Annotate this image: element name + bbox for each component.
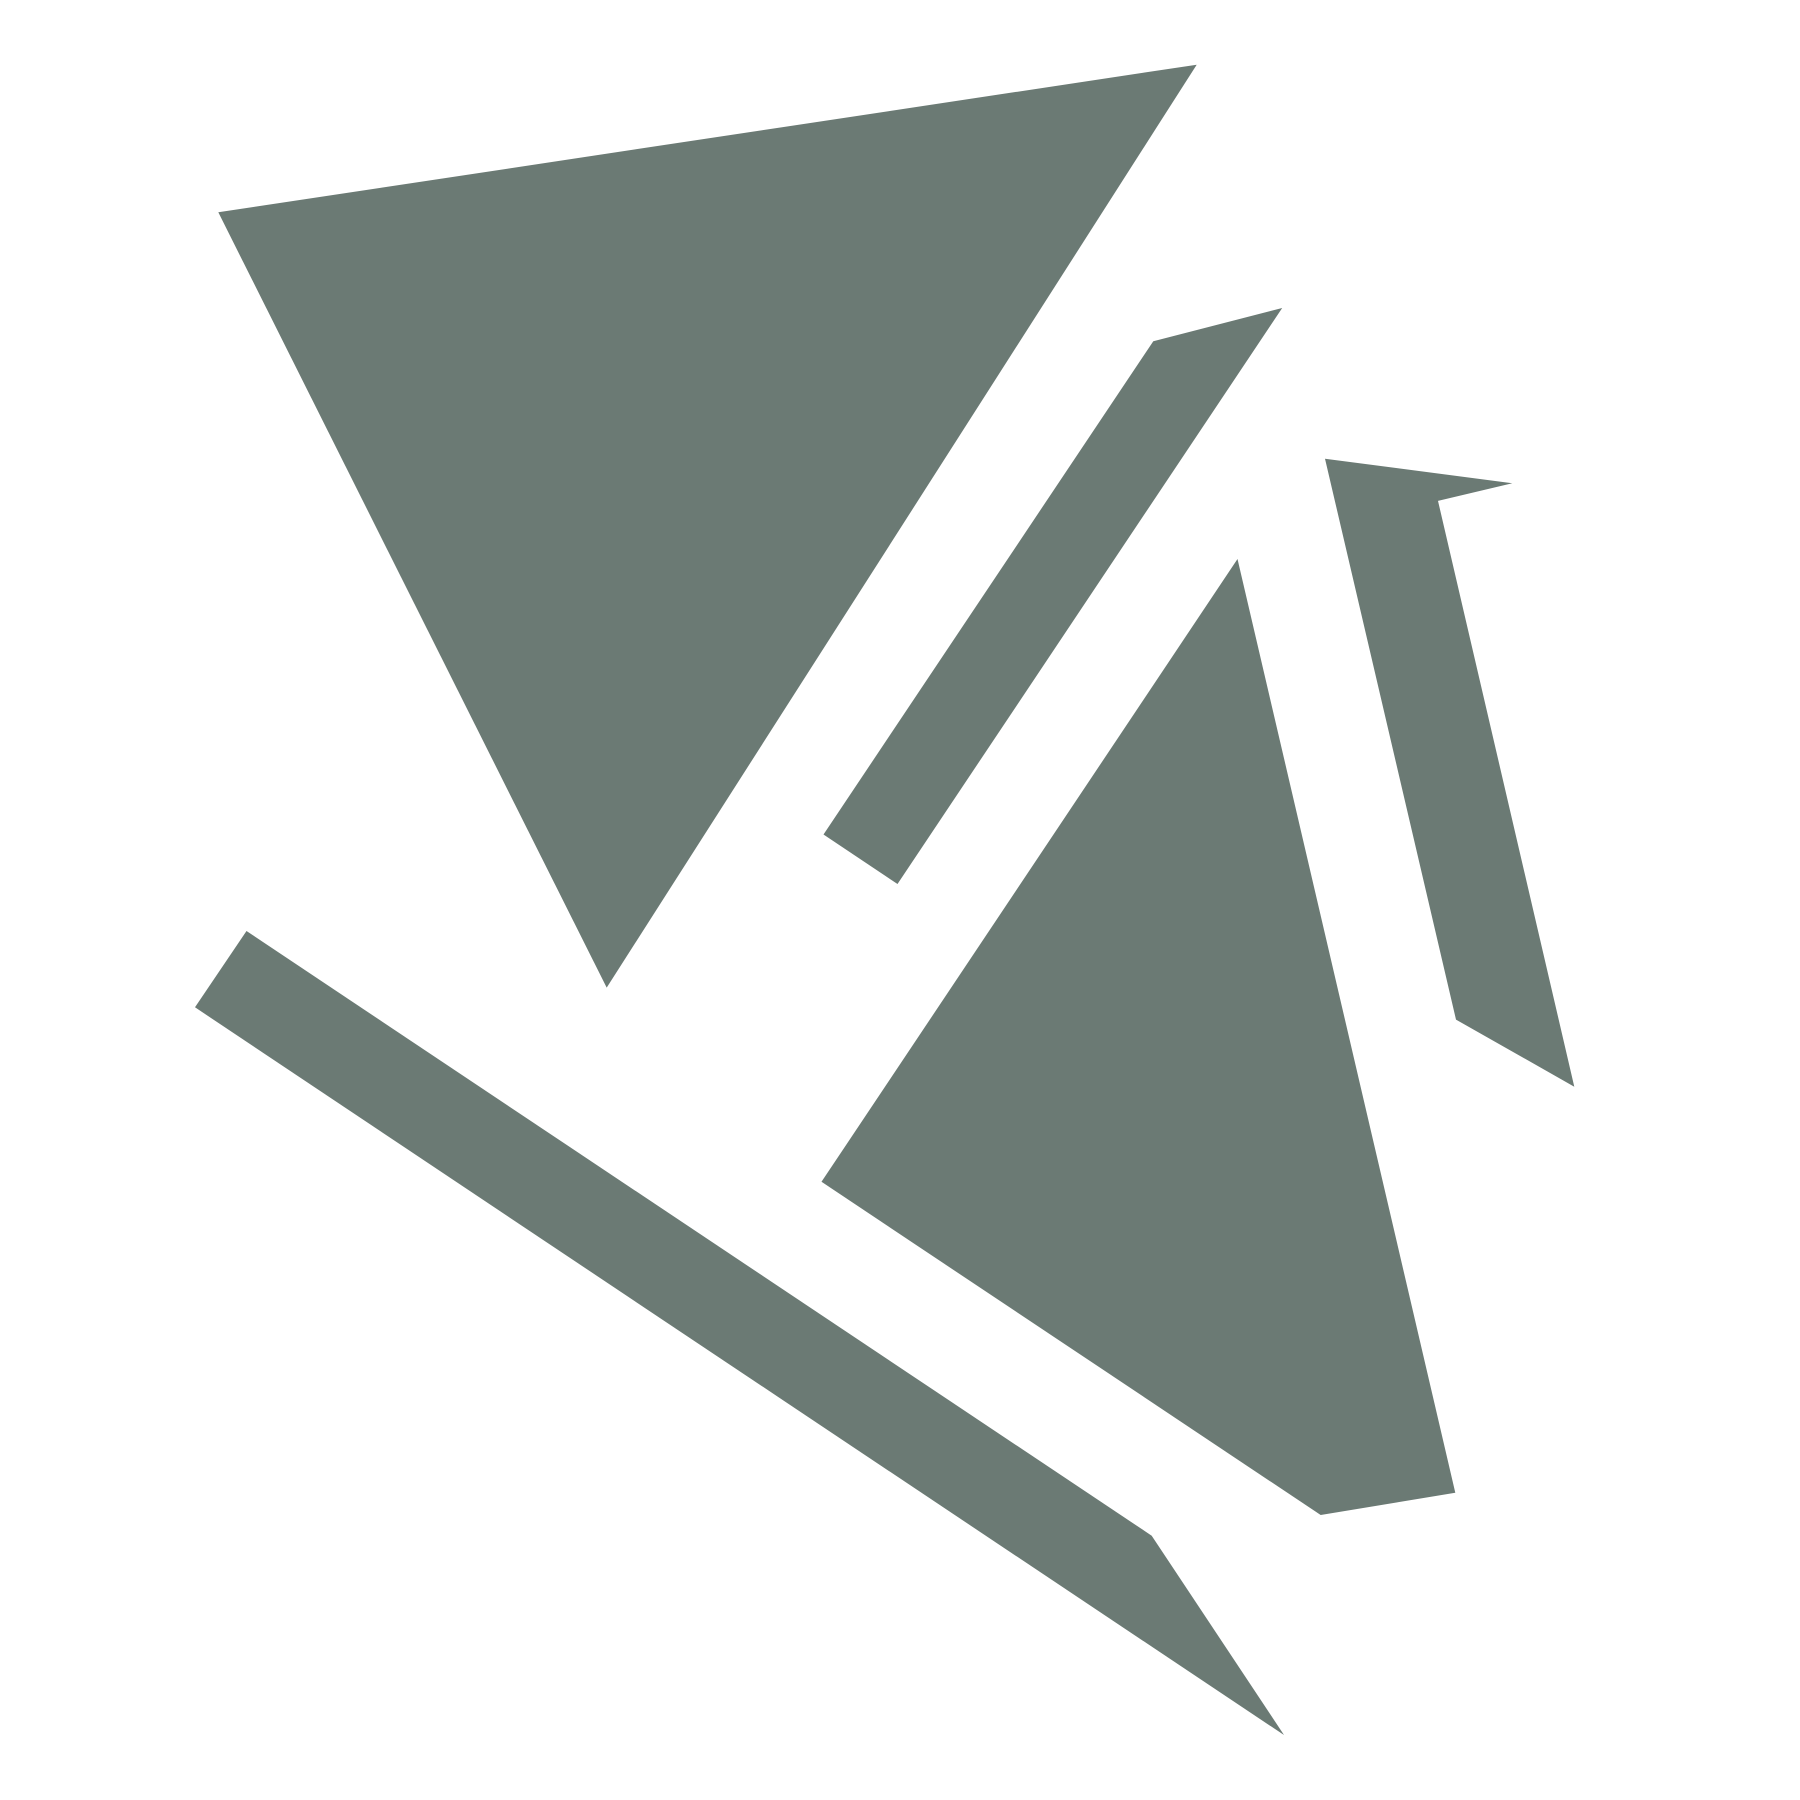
shape: narrow diagonal bar xyxy=(824,308,1282,884)
shape: long lower diagonal bar xyxy=(195,931,1284,1735)
shape: large upper triangle xyxy=(218,65,1197,988)
shape: right notched sliver xyxy=(1325,459,1574,1087)
shape: central lower wedge xyxy=(822,559,1455,1515)
